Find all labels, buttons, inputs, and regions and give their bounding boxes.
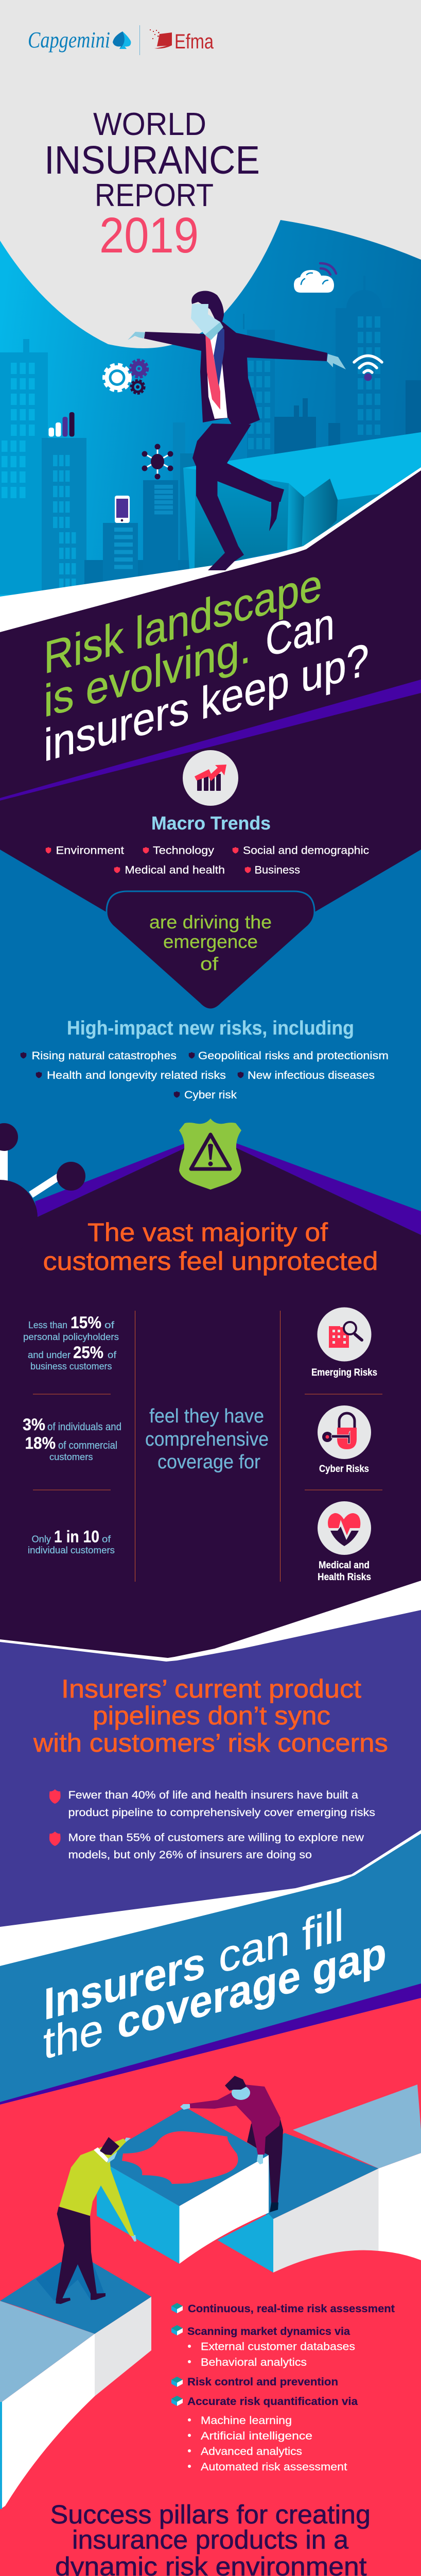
panel: insurers can fill the coverage gap [0,1830,421,2576]
callout: are driving the emergence of: of [200,953,219,974]
heading: risk landscape is evolving [44,558,369,771]
left platform [0,2297,151,2509]
roof and network decoration [0,1123,421,1700]
pipeline bullets [49,1789,375,1861]
icon: cloud [294,263,336,293]
stat: 3% and 18%: 18% [25,1434,56,1452]
title [44,107,260,263]
stat: 15% and 25%: personal policyholders [23,1332,119,1342]
pipeline bullets: More than 55% of customers are willing to explore new [68,1832,364,1843]
label: emerging risks: Emerging Risks [311,1367,377,1378]
logo: Capgemini: Capgemini [28,27,110,53]
stat: 3% and 18%: customers [49,1452,93,1462]
icon: cyber risks [318,1405,371,1459]
stat: 15% and 25%: and under [28,1350,71,1360]
macro trends list: Social and demographic [243,845,369,856]
new risks list: New infectious diseases [248,1070,375,1081]
center statement [145,1405,269,1473]
icon: wifi [354,355,382,381]
heading: pipelines: pipelines don’t sync [93,1701,330,1730]
panel: coverage statistics [23,1308,382,1583]
capabilities bullets: Automated risk assessment [201,2461,347,2473]
heading: coverage gap: the [43,2003,103,2069]
stat: 1 in 10: individual customers [28,1545,115,1555]
center statement: comprehensive [145,1429,269,1450]
icon: gears [104,360,148,394]
stat: 15% and 25%: Less than [28,1320,67,1330]
new risks list: Cyber risk [184,1089,237,1101]
callout: are driving the emergence of: are driving the [149,911,272,933]
macro trends list: Business [254,865,300,876]
heading: macro trends: Macro Trends [151,812,271,834]
center statement: feel they have [149,1405,264,1427]
label: medical and health risks [318,1560,371,1583]
callout: are driving the emergence of: emergence [163,931,258,952]
dark section start [0,470,421,1700]
stat: 15% and 25%: of [104,1320,115,1330]
macro trends list: Medical and health [125,865,225,876]
stat: 1 in 10: 1 in 10 [54,1527,99,1546]
capabilities bullets [171,2303,395,2473]
capabilities bullets: Advanced analytics [201,2446,302,2458]
heading: vast majority: customers feel unprotected [43,1247,378,1276]
cliff [183,432,421,569]
person: right [180,2076,283,2212]
stat: 15% and 25%: 25% [73,1343,103,1362]
heading: coverage gap: coverage gap [117,1927,387,2049]
new risks list: Rising natural catastrophes [32,1050,177,1062]
macro trends list [46,845,369,876]
heading: pipelines [33,1674,388,1757]
label: cyber risks: Cyber Risks [319,1464,369,1475]
icon: network [142,444,173,479]
logo: Efma [150,29,214,53]
pipeline bullets: models, but only 26% of insurers are doing so [68,1849,312,1861]
city skyline [0,276,421,595]
macro trends list: Technology [153,845,215,856]
heading: pipelines: Insurers’ current product [61,1674,361,1703]
white road strip [0,467,421,1030]
new risks list: Geopolitical risks and protectionism [198,1050,389,1062]
capabilities bullets: Risk control and prevention [187,2376,338,2388]
heading: risk landscape is evolving: is evolving. [44,620,251,727]
heading: risk landscape is evolving: Can [266,598,335,667]
businessman walking on the edge [128,291,346,570]
pipeline bullets: product pipeline to comprehensively cover emerging risks [68,1807,375,1819]
title: WORLD [93,107,206,142]
illustration: two people completing a puzzle block [0,2076,421,2334]
icon: warning shield [179,1118,241,1190]
heading: risk landscape is evolving: insurers keep up? [44,633,369,771]
panel: hero with title and tightrope walker [0,0,421,1700]
capabilities bullets: External customer databases [201,2341,355,2353]
icon: medical risks [318,1501,371,1555]
new risks list [21,1050,389,1101]
heading: coverage gap: can fill [219,1900,344,1983]
stat: 1 in 10: of [102,1534,111,1545]
heading: high-impact new risks: High-impact new risks, including [67,1018,354,1039]
pipeline bullets: Fewer than 40% of life and health insurers have built a [68,1789,358,1801]
icon: macro trends [183,750,238,806]
heading: success pillars: insurance products in a [72,2525,349,2554]
stat: 3% and 18% [23,1415,121,1462]
new risks list: Health and longevity related risks [47,1070,226,1081]
logo: Efma: Efma [174,30,214,53]
icon: phone [115,496,130,523]
stat: 15% and 25%: of [108,1350,117,1360]
heading: success pillars: Success pillars for creating [50,2500,371,2529]
stat: 3% and 18%: of individuals and [47,1421,121,1433]
heading: coverage gap: Insurers [44,1937,205,2030]
capabilities bullets: Accurate risk quantification via [187,2396,358,2408]
heading: vast majority [43,1218,378,1276]
capabilities bullets: Behavioral analytics [201,2357,307,2368]
title: 2019 [99,207,199,263]
callout: are driving the emergence of [107,891,314,1009]
heading: pipelines: with customers’ risk concerns [33,1728,388,1757]
stat: 3% and 18%: of commercial [58,1440,117,1451]
title: INSURANCE [44,138,260,182]
capabilities bullets: Continuous, real-time risk assessment [188,2303,395,2315]
heading: success pillars [50,2500,371,2576]
title: REPORT [95,178,214,213]
center statement: coverage for [157,1451,260,1473]
icon: signal bars [48,412,75,437]
heading: vast majority: The vast majority of [87,1218,328,1247]
heading: risk landscape is evolving: Risk landscape [44,558,322,684]
stat: 1 in 10: Only [32,1534,51,1545]
panel: product pipelines [0,1581,421,2009]
stat: 15% and 25%: 15% [71,1313,101,1332]
stat: 3% and 18%: 3% [23,1415,45,1434]
label: medical and health risks: Medical and [319,1560,370,1571]
panel: risk landscape headline [0,558,421,1700]
capabilities bullets: Scanning market dynamics via [187,2326,350,2337]
heading: coverage gap [43,1900,387,2069]
stat: 15% and 25%: business customers [30,1361,112,1371]
panel: capabilities list [0,2297,395,2576]
capabilities bullets: Machine learning [201,2415,292,2427]
stat: 1 in 10 [28,1527,115,1555]
macro trends list: Environment [56,845,124,856]
capabilities bullets: Artificial intelligence [201,2430,312,2442]
stat: 15% and 25% [23,1313,119,1371]
icon: emerging risks [317,1308,372,1361]
label: medical and health risks: Health Risks [318,1572,371,1583]
person: left [0,2137,151,2334]
